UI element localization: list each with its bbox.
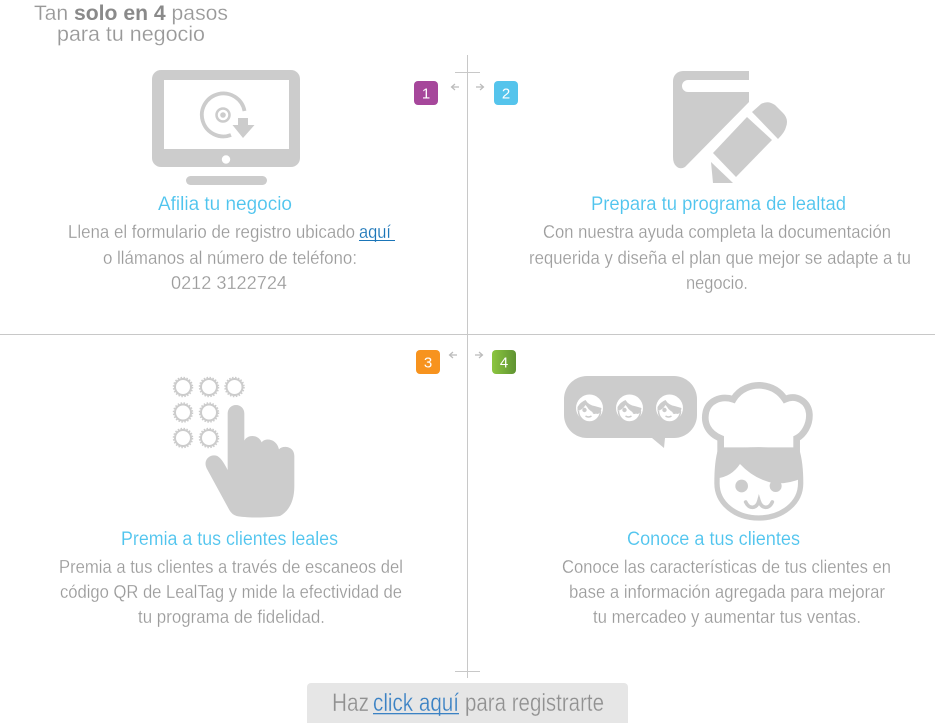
- text block: step 2 description: Con nuestra ayuda completa la documentación: [543, 221, 891, 242]
- badge: 2: 2: [502, 86, 510, 102]
- badge: 3: [416, 350, 440, 374]
- text block: step 4 description: tu mercadeo y aumentar tus ventas.: [593, 606, 861, 627]
- arrow: bottom left: [450, 352, 457, 358]
- icon: book and pencil: [673, 71, 787, 183]
- text block: step 1 description: [68, 221, 395, 293]
- badge: 1: [414, 81, 438, 105]
- call to action button: para registrarte: [465, 689, 604, 717]
- heading: conoce a tus clientes: Conoce a tus clientes: [627, 529, 800, 550]
- badge: 1: 1: [422, 86, 430, 102]
- text block: step 3 description: código QR de LealTag y mide la efectividad de: [60, 581, 402, 602]
- panel: step 1 afilia tu negocio: [68, 70, 395, 293]
- text block: step 3 description: tu programa de fidelidad.: [138, 606, 325, 627]
- call to action button: Haz: [332, 689, 369, 717]
- call to action button: [307, 683, 628, 723]
- text block: step 4 description: Conoce las características de tus clientes en: [562, 556, 891, 577]
- text block: step 2 description: [529, 221, 911, 293]
- title: Tan solo en 4 pasos: [34, 2, 228, 25]
- heading: prepara tu programa de lealtad: Prepara tu programa de lealtad: [591, 194, 846, 215]
- badge: 3: 3: [424, 354, 432, 372]
- text block: step 1 description: o llámanos al número de teléfono:: [103, 247, 357, 268]
- badge: 4: [492, 350, 516, 374]
- icon: monitor with disc download: [152, 70, 300, 185]
- text block: step 3 description: [59, 556, 403, 627]
- heading: afilia tu negocio: Afilia tu negocio: [158, 194, 292, 215]
- panel: step 4 conoce a tus clientes: [562, 376, 891, 627]
- text block: step 2 description: negocio.: [686, 272, 748, 293]
- panel: step 3 premia a tus clientes: [59, 378, 403, 627]
- arrow: top right: [476, 84, 484, 90]
- icon: speech bubble with faces: [564, 376, 697, 448]
- text block: step 1 description: aquí: [359, 221, 392, 242]
- arrow: bottom right: [475, 352, 482, 358]
- title: para tu negocio: [57, 23, 205, 46]
- arrow: top left: [452, 84, 459, 90]
- text block: step 1 description: 0212 3122724: [171, 272, 287, 293]
- text block: step 4 description: base a información agregada para mejorar: [569, 581, 885, 602]
- icon: keypad and pointing hand: [174, 378, 294, 517]
- call to action button: click aquí: [373, 689, 459, 717]
- text block: step 4 description: [562, 556, 891, 627]
- text block: step 3 description: Premia a tus clientes a través de escaneos del: [59, 556, 403, 577]
- badge: 2: [494, 81, 518, 105]
- heading: premia a tus clientes leales: Premia a tus clientes leales: [121, 529, 338, 550]
- text block: step 1 description: Llena el formulario de registro ubicado: [68, 221, 355, 242]
- icon: chef: [705, 385, 809, 518]
- badge: 4: 4: [500, 354, 508, 372]
- panel: step 2 prepara tu programa: [529, 71, 911, 293]
- title: [34, 2, 228, 46]
